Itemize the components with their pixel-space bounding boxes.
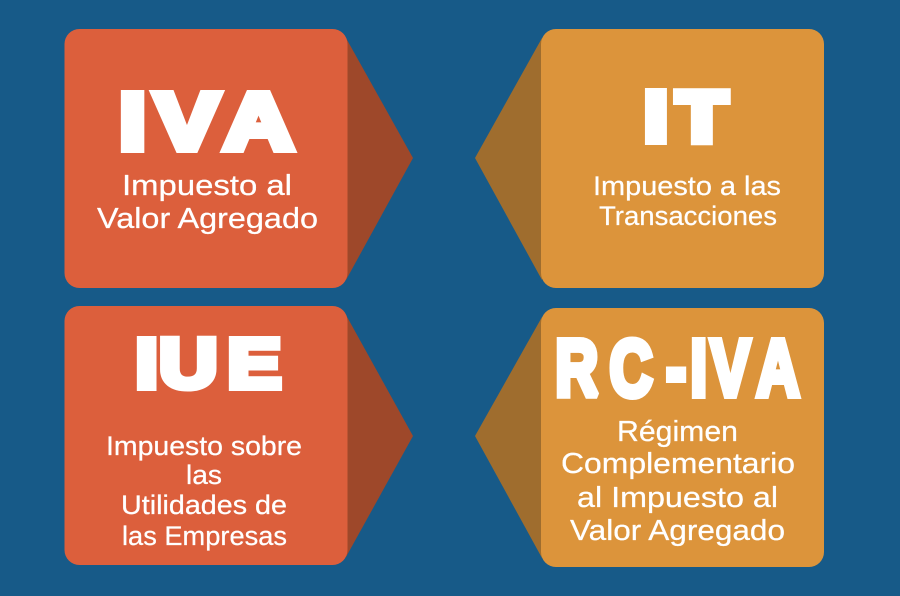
heading: IVA: IVA (119, 77, 293, 166)
card: IVA (64, 29, 348, 288)
card: IT (541, 29, 824, 288)
text: Régimen Complementario al Impuesto al Valor Agregado: Valor Agregado (570, 515, 785, 547)
arrow: RC-IVA pointing left (475, 317, 542, 558)
text: Régimen Complementario al Impuesto al Valor Agregado (561, 416, 795, 547)
text: Régimen Complementario al Impuesto al Valor Agregado: Complementario (561, 448, 795, 480)
text: Régimen Complementario al Impuesto al Valor Agregado: Régimen (617, 416, 738, 448)
text: Impuesto al Valor Agregado (97, 170, 318, 235)
arrow: IUE pointing right (346, 315, 413, 557)
text: Impuesto a las Transacciones: Impuesto a las (593, 171, 781, 201)
panel: IUE (64, 306, 413, 565)
panel: IVA (64, 29, 413, 288)
heading: IUE: IUE (136, 324, 281, 402)
text: Impuesto sobre las Utilidades de las Empresas: Impuesto sobre (106, 431, 302, 461)
card: RC-IVA (541, 308, 824, 567)
heading: IT: IT (645, 77, 726, 155)
text: Impuesto sobre las Utilidades de las Empresas: las Empresas (122, 521, 287, 551)
text: Impuesto sobre las Utilidades de las Empresas (106, 431, 302, 551)
text: Impuesto sobre las Utilidades de las Empresas: las (186, 460, 222, 490)
text: Impuesto a las Transacciones (593, 171, 781, 231)
arrow: IT pointing left (475, 38, 542, 280)
text: Impuesto al Valor Agregado: Impuesto al (122, 170, 292, 202)
text: Régimen Complementario al Impuesto al Valor Agregado: al Impuesto al (577, 482, 778, 514)
text: Impuesto sobre las Utilidades de las Empresas: Utilidades de (121, 490, 287, 520)
panel: RC-IVA (475, 308, 824, 567)
text: Impuesto a las Transacciones: Transacciones (599, 201, 777, 231)
panel: IT (475, 29, 824, 288)
heading: RC -IVA: RC -IVA (555, 323, 799, 413)
text: Impuesto al Valor Agregado: Valor Agregado (97, 203, 318, 235)
card: IUE (64, 306, 348, 565)
arrow: IVA pointing right (346, 38, 413, 280)
